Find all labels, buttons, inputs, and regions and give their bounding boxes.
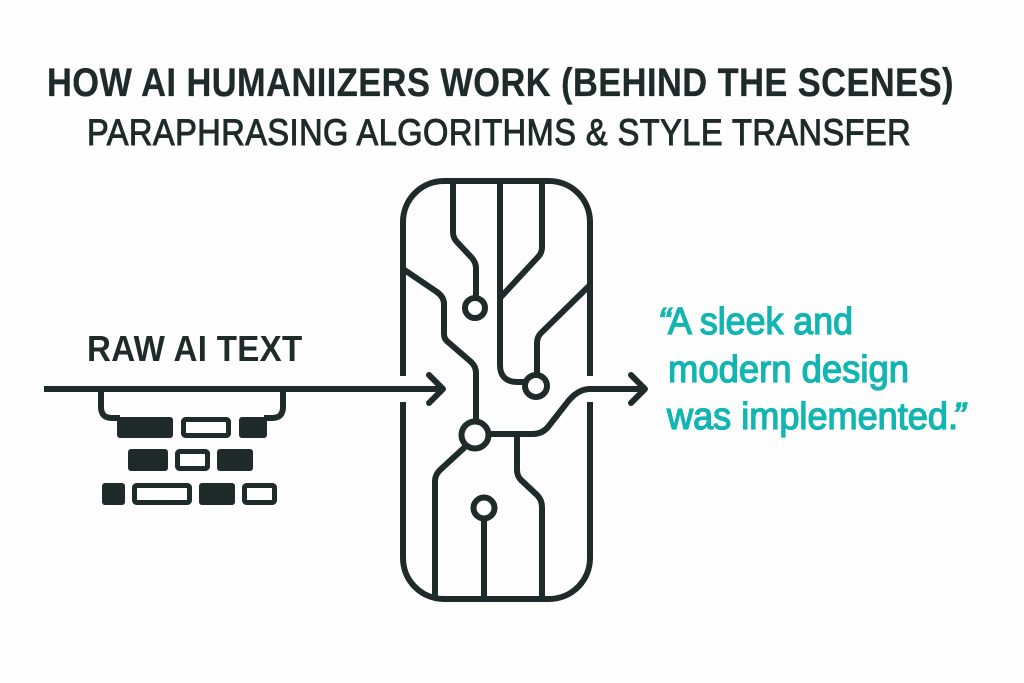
circuit nodes xyxy=(462,298,547,518)
input arrow xyxy=(44,375,443,403)
icon: raw text blocks xyxy=(101,389,283,505)
subtitle: PARAPHRASING ALGORITHMS & STYLE TRANSFER xyxy=(87,112,911,153)
humanized quote: “ xyxy=(658,301,673,343)
humanized quote xyxy=(658,301,968,438)
humanized quote: modern design xyxy=(668,349,909,391)
circuit traces xyxy=(403,181,590,599)
label: raw AI text: RAW AI TEXT xyxy=(87,330,302,369)
humanized quote: ” xyxy=(953,396,968,438)
title: HOW AI HUMANIIZERS WORK (BEHIND THE SCENES) xyxy=(47,60,953,105)
processor outline xyxy=(403,181,590,599)
icon: circuit processor xyxy=(403,181,590,599)
output arrow xyxy=(490,375,645,434)
humanized quote: A sleek and xyxy=(668,301,853,343)
humanized quote: was implemented. xyxy=(666,396,958,438)
